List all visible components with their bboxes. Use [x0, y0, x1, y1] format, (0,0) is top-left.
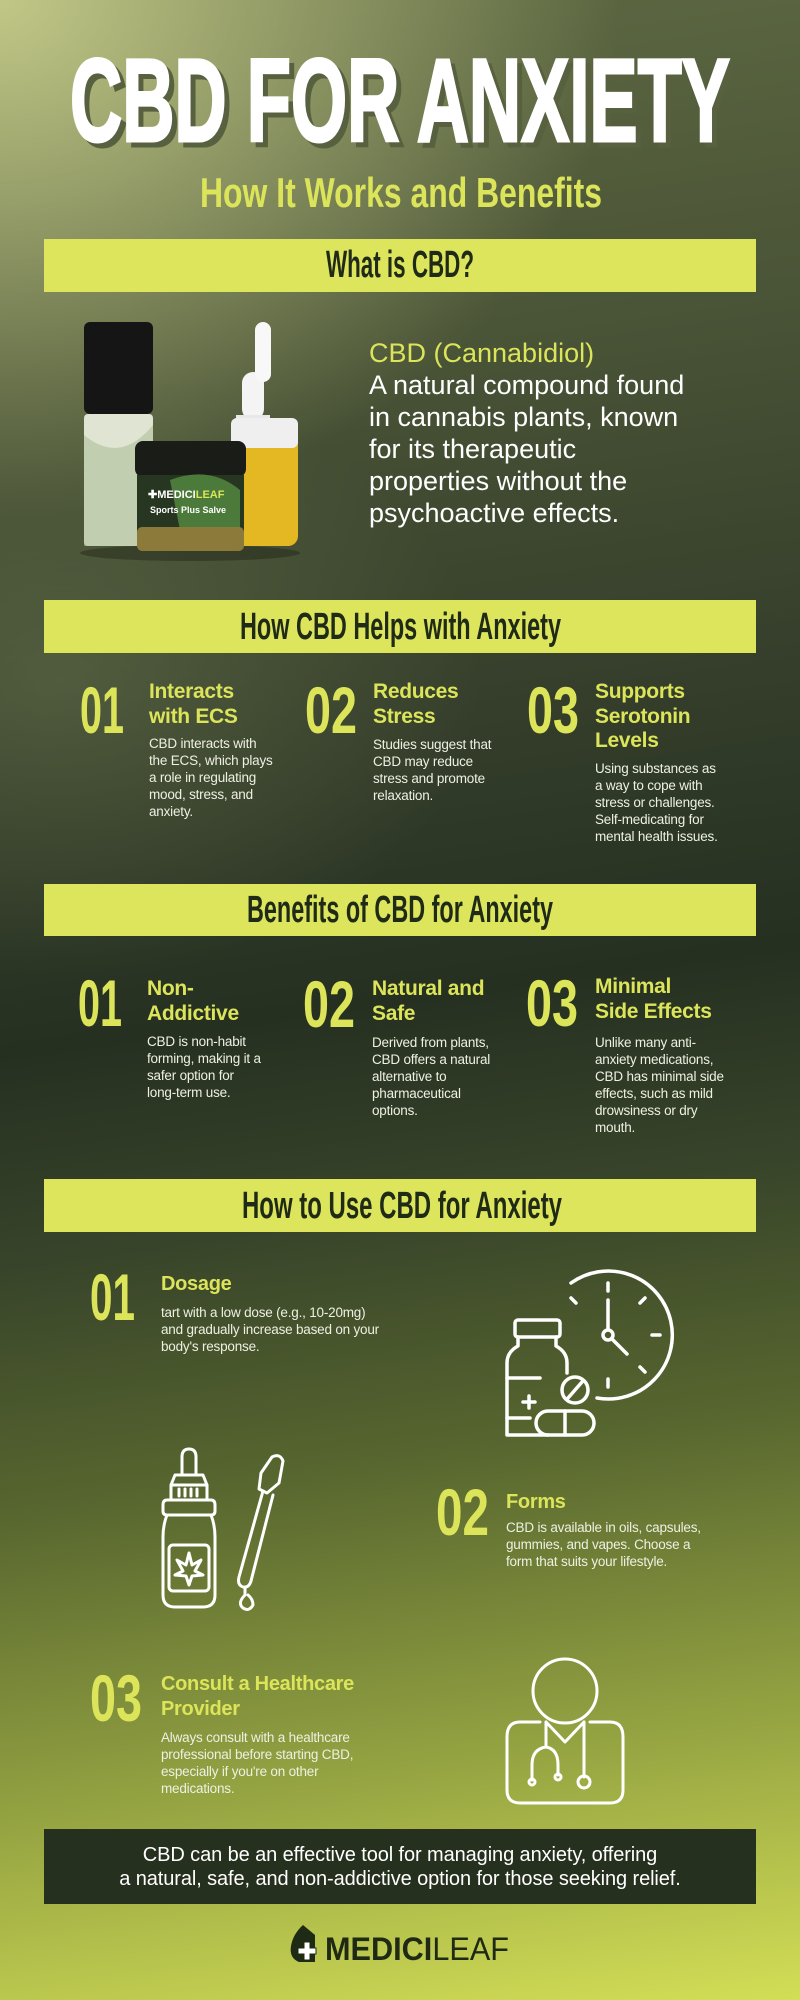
item: 01 Non-Addictive: safer option for — [147, 1068, 234, 1083]
banner: How CBD Helps: How CBD Helps with Anxiety — [240, 606, 561, 648]
product image — [80, 322, 300, 561]
conclusion banner — [44, 1829, 756, 1904]
step: 03 Consult a Healthcare Provider: Provider — [161, 1698, 240, 1720]
item: 02 Natural and Safe: options. — [372, 1103, 418, 1118]
banner: How to Use — [44, 1179, 756, 1232]
item: 03 Supports Serotonin: Levels — [595, 729, 659, 752]
item: 01 Interacts with ECS: mood, stress, and — [149, 787, 253, 802]
item: 02 Reduces Stress: Stress — [373, 704, 435, 728]
item: 02 Reduces Stress: Reduces — [373, 680, 458, 703]
item: 03 Minimal Side Effects: drowsiness or dry — [595, 1103, 697, 1118]
banner: Benefits — [44, 884, 756, 936]
item: 02 Reduces Stress: CBD may reduce — [373, 754, 473, 769]
item: 03 Minimal Side Effects: Side Effects — [595, 1000, 712, 1022]
step: 02 Forms: Forms — [506, 1491, 566, 1513]
step: 03 Consult a Healthcare Provider: especially if you're on other — [161, 1764, 318, 1779]
step: 02 Forms: form that suits your lifestyle. — [506, 1554, 667, 1569]
text: CBD definition: A natural compound found — [369, 370, 684, 400]
item: 02 Natural and Safe — [303, 977, 490, 1118]
item: 03 Supports Serotonin: mental health issues. — [595, 829, 718, 844]
item: 03 Minimal Side Effects: effects, such as mild — [595, 1086, 713, 1101]
item: 02 Natural and Safe: alternative to — [372, 1069, 446, 1084]
banner: Benefits: Benefits of CBD for Anxiety — [247, 889, 553, 931]
text: CBD definition — [369, 338, 684, 528]
item: 03 Supports Serotonin — [527, 680, 718, 844]
item: 03 Minimal Side Effects: anxiety medications, — [595, 1052, 713, 1067]
step: 02 Forms — [436, 1488, 701, 1569]
product image: ✚MEDICILEAF — [148, 489, 225, 501]
item: 01 Interacts with ECS: the ECS, which plays — [149, 753, 273, 768]
conclusion banner: a natural, safe, and non-addictive option for those seeking relief. — [119, 1868, 681, 1890]
item: 02 Natural and Safe: Safe — [372, 1002, 415, 1024]
banner: What is CBD — [44, 239, 756, 292]
item: 02 Natural and Safe: Derived from plants, — [372, 1035, 489, 1050]
step: 03 Consult a Healthcare Provider — [90, 1673, 354, 1796]
step: 01 Dosage: body's response. — [161, 1339, 259, 1354]
text: CBD definition: CBD (Cannabidiol) — [369, 338, 594, 368]
icon: medicine bottle and clock — [505, 1269, 674, 1437]
item: 03 Supports Serotonin: Serotonin — [595, 704, 690, 728]
item: 03 Supports Serotonin: stress or challenges. — [595, 795, 715, 810]
item: 01 Interacts with ECS — [80, 680, 273, 819]
item: 02 Natural and Safe: CBD offers a natural — [372, 1052, 490, 1067]
item: 03 Minimal Side Effects — [526, 975, 724, 1135]
step: 01 Dosage — [90, 1273, 379, 1354]
step: 03 Consult a Healthcare Provider: professional before starting CBD, — [161, 1747, 353, 1762]
item: 01 Non-Addictive: Non- — [147, 977, 194, 1000]
text: CBD definition: properties without the — [369, 466, 627, 496]
item: 01 Interacts with ECS: CBD interacts with — [149, 736, 256, 751]
step: 02 Forms: gummies, and vapes. Choose a — [506, 1537, 690, 1552]
step: 01 Dosage: Dosage — [161, 1273, 231, 1295]
text: CBD definition: for its therapeutic — [369, 434, 576, 464]
banner: How CBD Helps — [44, 600, 756, 653]
item: 02 Reduces Stress: stress and promote — [373, 771, 485, 786]
item: 01 Non-Addictive: long-term use. — [147, 1085, 230, 1100]
item: 01 Non-Addictive: Addictive — [147, 1002, 239, 1024]
item: 03 Minimal Side Effects: CBD has minimal side — [595, 1069, 724, 1084]
step: 03 Consult a Healthcare Provider: Always consult with a healthcare — [161, 1730, 350, 1745]
conclusion banner: CBD can be an effective tool for managing anxiety, offering — [143, 1844, 657, 1866]
item: 02 Natural and Safe: Natural and — [372, 977, 484, 1000]
icon: dropper bottle — [162, 1448, 284, 1611]
item: 01 Interacts with ECS: anxiety. — [149, 804, 193, 819]
item: 02 Reduces Stress: Studies suggest that — [373, 737, 491, 752]
item: 03 Minimal Side Effects: Minimal — [595, 975, 671, 998]
banner: How to Use: How to Use CBD for Anxiety — [242, 1185, 562, 1227]
icon: doctor — [506, 1658, 624, 1804]
item: 01 Interacts with ECS: with ECS — [149, 704, 238, 728]
item: 03 Minimal Side Effects: Unlike many anti- — [595, 1035, 696, 1050]
product image: Sports Plus Salve — [150, 505, 226, 515]
step: 02 Forms: CBD is available in oils, capsules, — [506, 1520, 701, 1535]
text: CBD definition: psychoactive effects. — [369, 498, 619, 528]
item: 03 Minimal Side Effects: mouth. — [595, 1120, 635, 1135]
item: 01 Non-Addictive — [78, 977, 261, 1100]
item: 01 Interacts with ECS: a role in regulating — [149, 770, 256, 785]
text: CBD definition: in cannabis plants, known — [369, 402, 678, 432]
logo: Medicileaf: MEDICILEAF — [325, 1931, 509, 1966]
banner: What is CBD: What is CBD? — [326, 244, 474, 286]
item: 03 Supports Serotonin: Self-medicating for — [595, 812, 704, 827]
item: 03 Supports Serotonin: Using substances as — [595, 761, 716, 776]
item: 01 Non-Addictive: CBD is non-habit — [147, 1034, 246, 1049]
item: 02 Reduces Stress — [305, 680, 492, 803]
item: 01 Non-Addictive: forming, making it a — [147, 1051, 261, 1066]
item: 02 Natural and Safe: pharmaceutical — [372, 1086, 461, 1101]
step: 03 Consult a Healthcare Provider: medications. — [161, 1781, 234, 1796]
item: 02 Reduces Stress: relaxation. — [373, 788, 433, 803]
step: 01 Dosage: and gradually increase based on your — [161, 1322, 379, 1337]
item: 03 Supports Serotonin: Supports — [595, 680, 685, 703]
step: 03 Consult a Healthcare Provider: Consult a Healthcare — [161, 1673, 354, 1695]
step: 01 Dosage: tart with a low dose (e.g., 10-20mg) — [161, 1305, 365, 1320]
item: 03 Supports Serotonin: a way to cope with — [595, 778, 702, 793]
item: 01 Interacts with ECS: Interacts — [149, 680, 234, 703]
